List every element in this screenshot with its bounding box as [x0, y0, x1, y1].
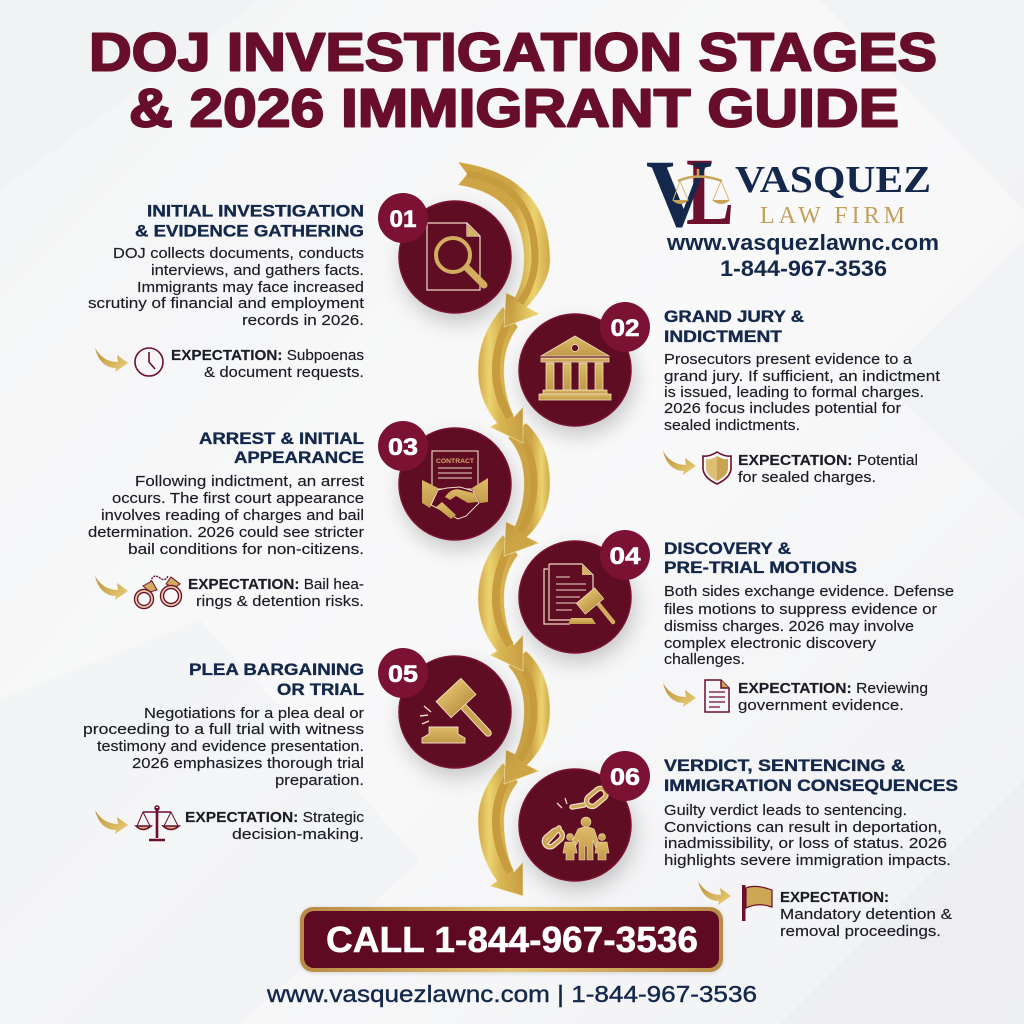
- step 03: [88, 421, 511, 610]
- title: DOJ INVESTIGATION STAGES: [89, 22, 937, 82]
- body 06: Convictions can result in deportation,: [664, 820, 942, 836]
- body 03: determination. 2026 could see stricter: [88, 525, 364, 541]
- badge 04: 04: [610, 543, 641, 570]
- heading 01: & EVIDENCE GATHERING: [135, 222, 364, 240]
- body 06: [664, 803, 951, 869]
- expectation 06: [780, 890, 952, 940]
- heading 02: [664, 308, 804, 346]
- icon: scales: [136, 806, 179, 840]
- phone: 1-844-967-3536: [720, 256, 887, 281]
- body 05: 2026 emphasizes thorough trial: [132, 756, 364, 772]
- firm subtitle: LAW FIRM: [760, 203, 905, 229]
- icon: handcuffs: [136, 576, 180, 607]
- circle 04 with papers and gavel: [519, 530, 650, 653]
- body 04: Both sides exchange evidence. Defense: [664, 584, 954, 600]
- step 04: [519, 530, 954, 714]
- expectation 05: decision-making.: [232, 827, 364, 843]
- body 03: [88, 474, 364, 558]
- firm name: VASQUEZ: [735, 159, 931, 201]
- expectation 03: EXPECTATION: Bail hea-: [188, 577, 364, 593]
- expectation 02: [738, 453, 918, 486]
- icon: shield: [703, 452, 731, 484]
- step 05: [83, 648, 511, 843]
- body 06: Guilty verdict leads to sentencing.: [664, 803, 907, 819]
- body 02: sealed indictments.: [664, 418, 800, 434]
- family figures: [563, 817, 609, 860]
- heading 03: ARREST & INITIAL: [199, 430, 364, 448]
- expectation 05: [185, 810, 364, 843]
- body 01: [88, 246, 364, 329]
- heading 03: APPEARANCE: [234, 449, 364, 467]
- arrow 02: [663, 451, 696, 475]
- title: [89, 22, 937, 138]
- heading 01: [135, 202, 364, 240]
- heading 06: IMMIGRATION CONSEQUENCES: [664, 777, 958, 795]
- step 01: [88, 193, 511, 381]
- heading 05: [189, 661, 364, 699]
- body 02: grand jury. If sufficient, an indictment: [664, 369, 940, 385]
- expectation 02: EXPECTATION: Potential: [738, 453, 918, 469]
- body 01: scrutiny of financial and employment: [88, 296, 364, 312]
- expectation 04: [738, 681, 928, 714]
- expectation 03: [188, 577, 364, 610]
- expectation 01: [171, 348, 364, 381]
- heading 03: [199, 430, 364, 467]
- arrow 01: [95, 348, 128, 372]
- body 05: [83, 706, 364, 789]
- body 03: involves reading of charges and bail: [101, 508, 364, 524]
- logo monogram VL with scales: V: [646, 140, 712, 247]
- body 02: is issued, leading to formal charges.: [664, 385, 924, 401]
- heading 02: INDICTMENT: [664, 328, 782, 346]
- icon: gavel: [420, 678, 488, 743]
- body 01: records in 2026.: [242, 313, 364, 329]
- circle 02 with courthouse: [519, 302, 650, 426]
- body 04: files motions to suppress evidence or: [664, 602, 937, 618]
- badge 03: 03: [388, 434, 418, 461]
- icon: broken chain and family: [542, 786, 609, 860]
- body 06: highlights severe immigration impacts.: [664, 853, 951, 869]
- logo: Vasquez Law Firm: [646, 138, 939, 281]
- body 05: Negotiations for a plea deal or: [144, 706, 364, 722]
- heading 04: [664, 540, 857, 577]
- expectation 05: EXPECTATION: Strategic: [185, 810, 364, 826]
- arrow 04: [663, 683, 696, 707]
- arrow 03: [95, 576, 128, 600]
- call button: [300, 907, 723, 972]
- timeline arrows: [458, 162, 550, 896]
- arrow 06: [698, 881, 731, 905]
- expectation 06: removal proceedings.: [780, 924, 941, 940]
- expectation 04: government evidence.: [738, 698, 904, 714]
- body 01: Immigrants may face increased: [137, 280, 364, 296]
- footer contact line: www.vasquezlawnc.com | 1-844-967-3536: [266, 981, 757, 1007]
- step 06: [519, 751, 958, 940]
- heading 05: OR TRIAL: [277, 681, 364, 699]
- arrow 05: [95, 810, 128, 834]
- body 04: [664, 584, 954, 668]
- icon: contract and handshake: CONTRACT: [436, 458, 474, 465]
- icon: clock: [135, 348, 163, 376]
- body 01: interviews, and gathers facts.: [151, 263, 364, 279]
- icon: document and magnifier: [427, 223, 484, 290]
- call button: CALL 1-844-967-3536: [326, 919, 698, 960]
- body 05: preparation.: [275, 773, 364, 789]
- body 02: Prosecutors present evidence to a: [664, 352, 913, 368]
- heading 04: DISCOVERY &: [664, 540, 791, 558]
- body 05: testimony and evidence presentation.: [97, 739, 364, 755]
- title: & 2026 IMMIGRANT GUIDE: [129, 78, 899, 138]
- expectation 02: for sealed charges.: [738, 470, 876, 486]
- body 04: challenges.: [664, 652, 745, 668]
- body 01: DOJ collects documents, conducts: [113, 246, 364, 262]
- icon: flag: [742, 885, 772, 921]
- circle 03 with contract and handshake: [378, 421, 511, 540]
- heading 05: PLEA BARGAINING: [189, 661, 364, 679]
- expectation 01: & document requests.: [204, 365, 364, 381]
- step 02: [519, 302, 940, 486]
- body 04: dismiss charges. 2026 may involve: [664, 619, 914, 635]
- heading 04: PRE-TRIAL MOTIONS: [664, 559, 857, 577]
- icon: courthouse: [539, 336, 611, 400]
- heading 06: [664, 757, 958, 795]
- body 06: inadmissibility, or loss of status. 2026: [664, 836, 947, 852]
- expectation 06: Mandatory detention &: [780, 907, 952, 923]
- expectation 03: rings & detention risks.: [196, 594, 364, 610]
- expectation 06: EXPECTATION:: [780, 890, 889, 906]
- icon: document: [705, 680, 729, 712]
- body 04: complex electronic discovery: [664, 636, 877, 652]
- heading 01: INITIAL INVESTIGATION: [147, 202, 364, 220]
- heading 06: VERDICT, SENTENCING &: [664, 757, 905, 775]
- badge 02: 02: [610, 315, 640, 342]
- badge 06: 06: [610, 764, 640, 791]
- circle 05 with gavel: [378, 648, 511, 768]
- badge 01: 01: [390, 206, 416, 233]
- badge 05: 05: [388, 661, 418, 688]
- body 02: 2026 focus includes potential for: [664, 401, 901, 417]
- website: www.vasquezlawnc.com: [666, 230, 939, 255]
- body 05: proceeding to a full trial with witness: [83, 722, 364, 738]
- body 02: [664, 352, 940, 434]
- body 03: Following indictment, an arrest: [135, 474, 364, 490]
- body 03: occurs. The first court appearance: [112, 491, 364, 507]
- expectation 01: EXPECTATION: Subpoenas: [171, 348, 364, 364]
- circle 06 with broken chain and family: [519, 751, 650, 881]
- expectation 04: EXPECTATION: Reviewing: [738, 681, 928, 697]
- body 03: bail conditions for non-citizens.: [128, 542, 364, 558]
- heading 02: GRAND JURY &: [664, 308, 804, 326]
- logo monogram VL with scales: L: [686, 138, 734, 245]
- icon: papers and gavel: [544, 564, 613, 624]
- circle 01 with document and magnifier: [378, 193, 511, 313]
